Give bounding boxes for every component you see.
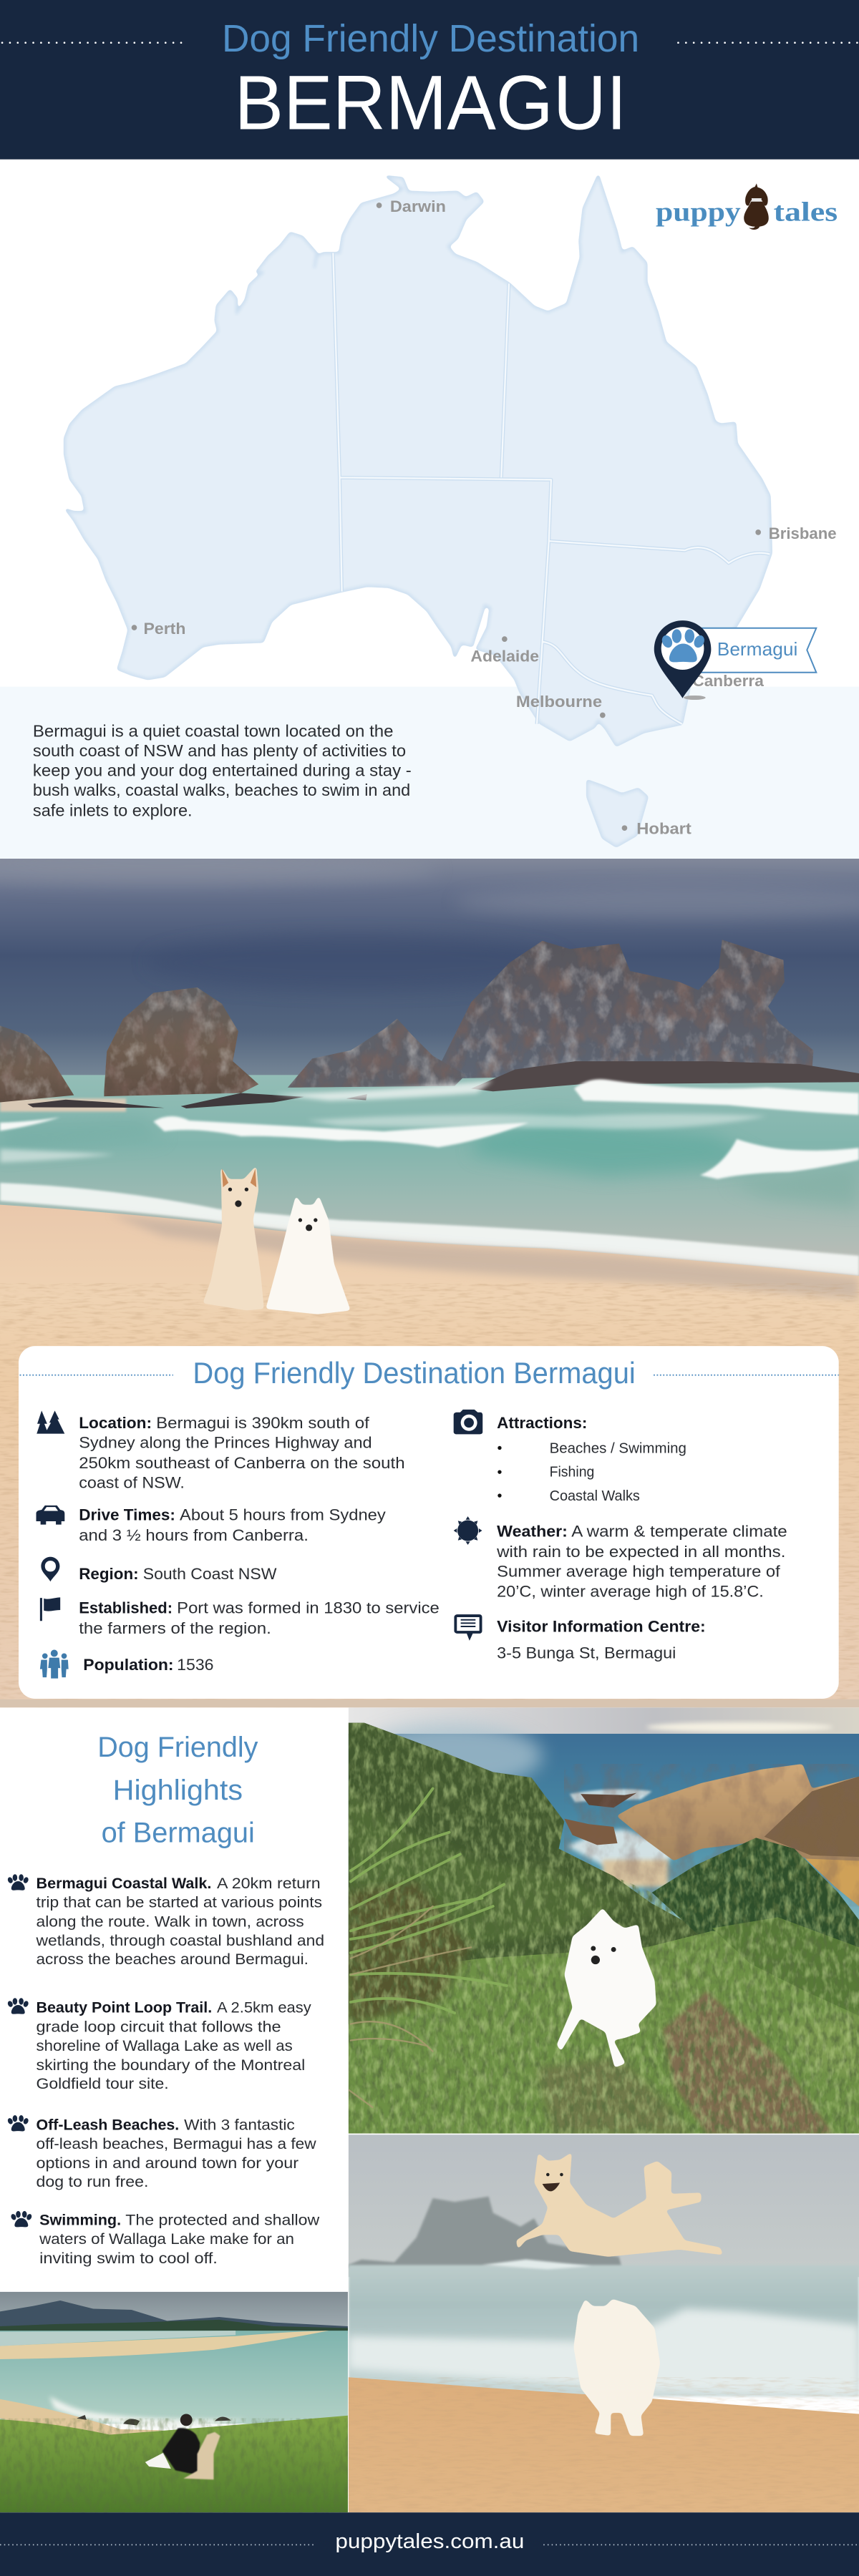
location text: [79, 1414, 405, 1491]
established text: the farmers of the region.: [79, 1619, 271, 1637]
photo: person and dogs overlooking inlet: [0, 2292, 348, 2514]
heading: highlights: [97, 1732, 258, 1848]
location text: Sydney along the Princes Highway and: [79, 1433, 372, 1451]
drive times text: [79, 1506, 387, 1544]
icon: paw: [7, 1874, 29, 1890]
intro text block: bush walks, coastal walks, beaches to swim in and: [33, 781, 410, 799]
weather text: Weather:: [497, 1522, 568, 1540]
location text: Location:: [79, 1414, 152, 1432]
drive times text: About 5 hours from Sydney: [180, 1506, 387, 1523]
icon: location pin: [41, 1557, 59, 1581]
heading: highlights: Highlights: [113, 1775, 243, 1806]
city labels: Melbourne: [516, 693, 602, 711]
icon: trees: [37, 1410, 64, 1434]
highlight: coastal walk: trip that can be started at various points: [37, 1895, 322, 1911]
intro text block: south coast of NSW and has plenty of activities to: [33, 741, 406, 760]
icon: speech bubble: [454, 1614, 482, 1641]
logo: puppy tales: puppy: [656, 197, 741, 227]
city labels: Hobart: [636, 820, 691, 838]
city labels: Darwin: [390, 197, 446, 215]
highlight: off-leash beaches: [7, 2115, 316, 2190]
region text: [79, 1565, 277, 1583]
header banner: [0, 0, 859, 160]
highlight: off-leash beaches: With 3 fantastic: [184, 2117, 295, 2133]
highlight: beauty point: shoreline of Wallaga Lake as well as: [37, 2038, 293, 2054]
highlight: coastal walk: across the beaches around Bermagui.: [37, 1951, 309, 1968]
highlight: beauty point: skirting the boundary of the Montreal: [37, 2057, 305, 2074]
highlight: swimming: [10, 2211, 320, 2267]
highlight: coastal walk: along the route. Walk in town, across: [37, 1913, 304, 1930]
photo: dog on coastal headland: [349, 1707, 859, 2134]
icon: paw: [7, 1998, 29, 2014]
population text: Population:: [83, 1656, 174, 1674]
title: Bermagui: BERMAGUI: [235, 59, 627, 146]
heading: highlights: Dog Friendly: [97, 1732, 258, 1763]
highlight: off-leash beaches: off-leash beaches, Bermagui has a few: [37, 2136, 316, 2152]
highlight: beauty point: grade loop circuit that follows the: [37, 2019, 281, 2035]
section: beach photo and info card: [0, 853, 859, 1717]
highlight: off-leash beaches: options in and around town for your: [37, 2155, 299, 2172]
section: highlights: [0, 1707, 859, 2576]
grass blades: [351, 1788, 507, 2013]
dog: jumping: [516, 2152, 723, 2257]
location text: 250km southeast of Canberra on the south: [79, 1454, 405, 1472]
highlight: swimming: inviting swim to cool off.: [39, 2250, 218, 2267]
location pin and ribbon: Bermagui: [654, 620, 816, 700]
attractions text: Attractions:: [497, 1414, 587, 1432]
attractions text: [497, 1414, 686, 1504]
dog: white spitz sitting: [557, 1908, 656, 2068]
weather text: Summer average high temperature of: [497, 1562, 781, 1580]
person and dogs: [145, 2414, 220, 2479]
waves: [0, 1079, 859, 1276]
highlight: beauty point: [7, 1998, 311, 2092]
card heading: Dog Friendly Destination Bermagui: [193, 1356, 636, 1390]
established text: [79, 1599, 440, 1637]
photo: dog jumping on beach: [349, 2135, 859, 2514]
intro text block: keep you and your dog entertained during a stay -: [33, 761, 412, 779]
icon: sun: [454, 1516, 482, 1545]
highlight: beauty point: Goldfield tour site.: [37, 2076, 169, 2092]
highlight: coastal walk: wetlands, through coastal bushland and: [35, 1933, 324, 1949]
intro text block: Bermagui is a quiet coastal town located on the: [33, 721, 393, 740]
location pin and ribbon: Bermagui: Bermagui: [717, 638, 797, 660]
intro band: [0, 687, 859, 859]
highlight: beauty point: A 2.5km easy: [217, 2000, 311, 2016]
intro text block: [33, 721, 412, 819]
region text: South Coast NSW: [143, 1565, 277, 1583]
established text: Established:: [79, 1599, 173, 1617]
established text: Port was formed in 1830 to service: [177, 1599, 440, 1617]
icon: flag: [40, 1597, 60, 1621]
highlight: beauty point: Beauty Point Loop Trail.: [37, 2000, 212, 2016]
weather text: [496, 1522, 787, 1601]
rock stacks: [0, 935, 859, 1108]
region text: Region:: [79, 1565, 139, 1583]
weather text: 20’C, winter average high of 15.8’C.: [497, 1583, 764, 1601]
icon: paw: [10, 2211, 33, 2227]
location text: coast of NSW.: [79, 1473, 185, 1491]
city labels: Adelaide: [470, 647, 539, 665]
visitor information text: [497, 1618, 706, 1662]
photo: two dogs on beach with rock stacks: [0, 853, 859, 1717]
weather text: A warm & temperate climate: [571, 1522, 787, 1540]
icon: car: [37, 1506, 64, 1525]
cliffs: [564, 1764, 859, 1906]
state borders: [333, 253, 770, 724]
icon: paw: [7, 2115, 29, 2131]
visitor information text: Visitor Information Centre:: [497, 1618, 706, 1636]
highlight: swimming: The protected and shallow: [125, 2212, 320, 2228]
highlight: swimming: Swimming.: [39, 2212, 121, 2228]
city labels: Perth: [144, 620, 185, 638]
city labels: Brisbane: [769, 525, 837, 542]
dog: white dog: [266, 1196, 351, 1314]
location text: Bermagui is 390km south of: [156, 1414, 370, 1432]
footer banner: [0, 2512, 859, 2576]
highlight: coastal walk: Bermagui Coastal Walk.: [37, 1875, 211, 1892]
footer website: puppytales.com.au: [335, 2530, 524, 2553]
dog: standing white: [573, 2299, 660, 2436]
highlight: coastal walk: [7, 1874, 324, 1968]
intro text block: safe inlets to explore.: [33, 801, 193, 819]
heading: highlights: of Bermagui: [102, 1817, 255, 1848]
drive times text: Drive Times:: [79, 1506, 175, 1523]
city labels: Canberra: [692, 672, 765, 690]
icon: people: [40, 1649, 69, 1679]
info card: [19, 1346, 839, 1699]
icon: camera: [454, 1410, 482, 1434]
heading: dog friendly destination: Dog Friendly Destination: [222, 18, 639, 60]
attractions text: Fishing: [550, 1464, 594, 1480]
population text: [83, 1656, 213, 1674]
dog: cream dog: [203, 1166, 264, 1310]
logo: puppy tales: [656, 183, 838, 230]
highlight: coastal walk: A 20km return: [217, 1875, 321, 1892]
map of Australia: [64, 175, 837, 847]
Tasmania: [587, 781, 648, 847]
visitor information text: 3-5 Bunga St, Bermagui: [497, 1644, 676, 1662]
highlight: off-leash beaches: dog to run free.: [37, 2174, 148, 2190]
weather text: with rain to be expected in all months.: [496, 1543, 785, 1561]
highlight: swimming: waters of Wallaga Lake make for an: [39, 2231, 294, 2248]
city labels: [132, 197, 837, 838]
logo: puppy tales: tales: [774, 197, 838, 227]
icon: paw: [660, 629, 707, 662]
icon: dog: [744, 183, 769, 230]
attractions text: Coastal Walks: [550, 1488, 640, 1504]
population text: 1536: [177, 1656, 213, 1674]
attractions text: Beaches / Swimming: [550, 1440, 686, 1456]
drive times text: and 3 ½ hours from Canberra.: [79, 1526, 309, 1544]
highlight: off-leash beaches: Off-Leash Beaches.: [37, 2117, 179, 2133]
foliage and grass: [349, 1717, 859, 2134]
sand: [0, 1205, 859, 1717]
